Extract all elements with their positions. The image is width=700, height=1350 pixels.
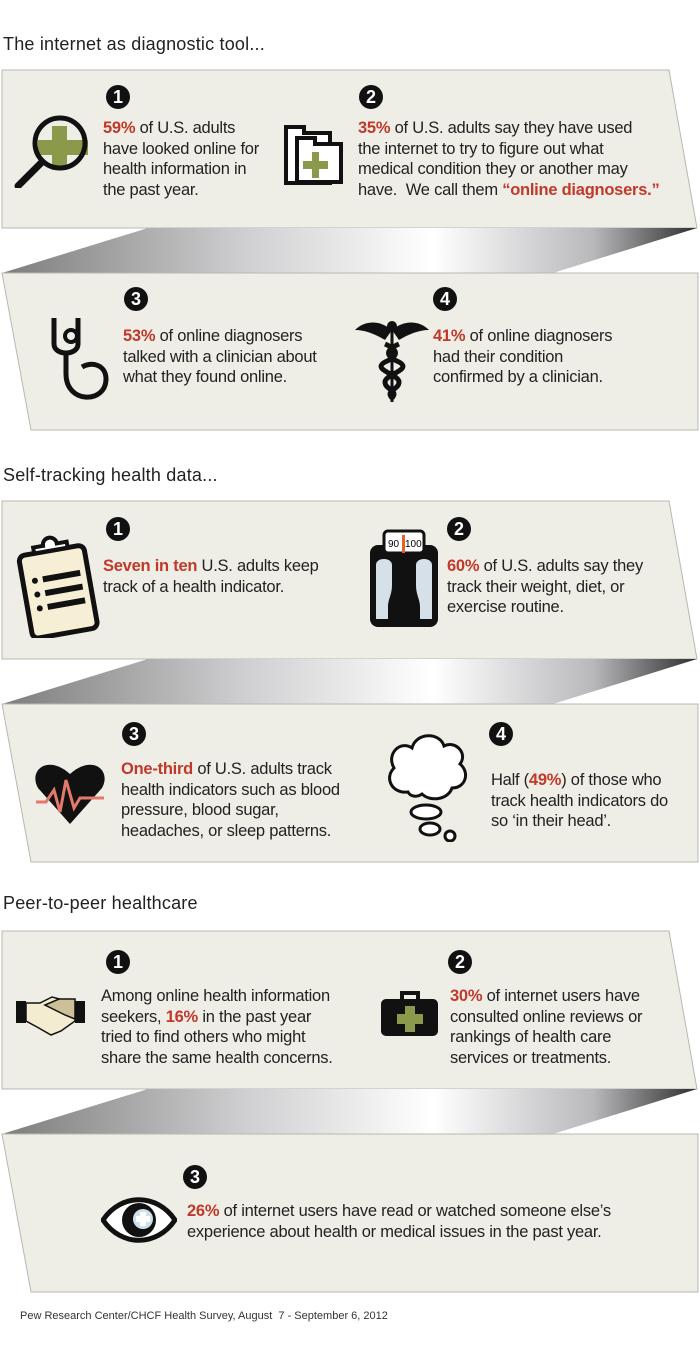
number 3: 3 <box>190 1167 200 1187</box>
text 2: have. We call them “online diagnosers.” <box>358 180 659 198</box>
text 2: the internet to try to figure out what <box>358 140 603 158</box>
icon: stethoscope <box>52 318 108 400</box>
text 4: confirmed by a clinician. <box>433 368 603 386</box>
number 2: 2 <box>455 952 465 972</box>
text 2: 30% of internet users have <box>450 987 640 1005</box>
icon: heart <box>35 764 105 824</box>
number 4: 4 <box>496 724 506 744</box>
text 3 <box>187 1202 611 1240</box>
text 3: what they found online. <box>123 368 287 386</box>
text 4 <box>491 771 668 830</box>
text 2: exercise routine. <box>447 598 564 616</box>
number 2 <box>359 85 383 109</box>
footer source: Pew Research Center/CHCF Health Survey, August 7 - September 6, 2012 <box>20 1310 388 1322</box>
text 2: consulted online reviews or <box>450 1008 642 1026</box>
text 3: 26% of internet users have read or watched someone else’s <box>187 1202 611 1220</box>
text 2: rankings of health care <box>450 1028 611 1046</box>
text 1 <box>103 119 259 198</box>
icon: medical kit <box>381 991 438 1036</box>
text 3: talked with a clinician about <box>123 348 317 366</box>
text 1: have looked online for <box>103 140 259 158</box>
number 3 <box>183 1165 207 1189</box>
text 4: 41% of online diagnosers <box>433 327 612 345</box>
icon: magnifier <box>14 116 88 188</box>
text 1: Among online health information <box>101 987 330 1005</box>
text 1: health information in <box>103 160 246 178</box>
text 1: Seven in ten U.S. adults keep <box>103 557 319 575</box>
text 1 <box>103 557 319 596</box>
number 2: 2 <box>454 519 464 539</box>
text 4: so ‘in their head’. <box>491 812 611 830</box>
text 3: health indicators such as blood <box>121 780 340 798</box>
text 1 <box>101 987 333 1066</box>
number 3: 3 <box>131 289 141 309</box>
number 1: 1 <box>113 952 123 972</box>
text 3: pressure, blood sugar, <box>121 801 279 819</box>
text 2 <box>358 119 659 198</box>
text 1: 59% of U.S. adults <box>103 119 235 137</box>
title: section 3: Peer-to-peer healthcare <box>3 893 198 913</box>
number 2 <box>447 517 471 541</box>
icon: caduceus <box>355 321 429 402</box>
number 2: 2 <box>366 87 376 107</box>
title: section 1: The internet as diagnostic tool... <box>3 34 265 54</box>
text 2 <box>447 557 644 616</box>
title: section 2: Self-tracking health data... <box>3 465 218 485</box>
text 3: 53% of online diagnosers <box>123 327 302 345</box>
text 3: headaches, or sleep patterns. <box>121 822 331 840</box>
text 1: the past year. <box>103 180 199 198</box>
text 2: track their weight, diet, or <box>447 578 624 596</box>
text 4: had their condition <box>433 348 563 366</box>
icon: eye <box>101 1197 177 1243</box>
icon: thought cloud <box>388 734 468 842</box>
text 4 <box>433 327 612 386</box>
number 4 <box>489 722 513 746</box>
number 1 <box>106 517 130 541</box>
text 2 <box>450 987 642 1066</box>
icon: handshake <box>16 996 85 1036</box>
number 3 <box>124 287 148 311</box>
icon: scale <box>370 530 438 627</box>
text 2: services or treatments. <box>450 1048 611 1066</box>
icon: scale: 90 <box>388 539 400 550</box>
text 1: share the same health concerns. <box>101 1048 333 1066</box>
number 1 <box>106 85 130 109</box>
text 2: 35% of U.S. adults say they have used <box>358 119 632 137</box>
text 1: track of a health indicator. <box>103 578 284 596</box>
number 1: 1 <box>113 519 123 539</box>
icon: scale: 100 <box>405 539 422 550</box>
number 3: 3 <box>129 724 139 744</box>
text 3: One-third of U.S. adults track <box>121 760 332 778</box>
text 1: tried to find others who might <box>101 1028 305 1046</box>
number 3 <box>122 722 146 746</box>
text 3 <box>123 327 317 386</box>
number 1: 1 <box>113 87 123 107</box>
text 2: medical condition they or another may <box>358 160 628 178</box>
text 4: track health indicators do <box>491 792 668 810</box>
number 1 <box>106 950 130 974</box>
text 4: Half (49%) of those who <box>491 771 661 789</box>
number 2 <box>448 950 472 974</box>
icon: clipboard <box>16 536 100 638</box>
icon: folders <box>284 125 343 185</box>
number 4 <box>433 287 457 311</box>
text 3 <box>121 760 340 840</box>
number 4: 4 <box>440 289 450 309</box>
text 1: seekers, 16% in the past year <box>101 1008 311 1026</box>
text 3: experience about health or medical issues in the past year. <box>187 1222 602 1240</box>
text 2: 60% of U.S. adults say they <box>447 557 643 575</box>
